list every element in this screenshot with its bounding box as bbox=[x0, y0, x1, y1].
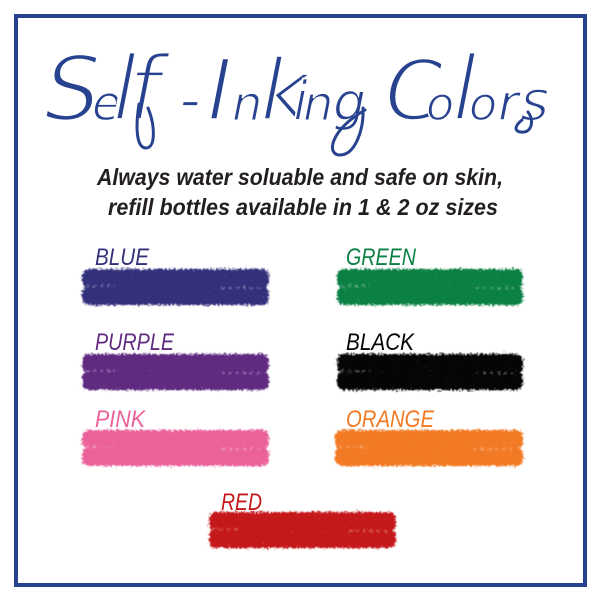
title: r bbox=[498, 74, 522, 132]
title: f bbox=[128, 37, 172, 142]
title: S bbox=[44, 37, 101, 142]
subtitle: Always water soluable and safe on skin, bbox=[96, 164, 503, 190]
subtitle: refill bottles available in 1 & 2 oz sizes bbox=[108, 194, 498, 220]
swatch: green: GREEN bbox=[346, 244, 417, 271]
title: k bbox=[260, 41, 313, 141]
subtitle bbox=[96, 164, 503, 220]
title: o bbox=[469, 77, 497, 131]
swatch: blue bbox=[82, 244, 269, 305]
swatch: orange bbox=[335, 406, 523, 466]
swatch: purple bbox=[82, 329, 269, 390]
title: I bbox=[207, 41, 232, 141]
title: - bbox=[160, 65, 201, 135]
swatch: pink: PINK bbox=[95, 406, 146, 433]
title bbox=[44, 37, 549, 155]
title: n bbox=[303, 76, 333, 132]
title: s bbox=[520, 69, 549, 134]
swatch: purple: PURPLE bbox=[95, 329, 175, 356]
title: e bbox=[92, 76, 122, 132]
title: l bbox=[112, 37, 137, 142]
title: n bbox=[232, 76, 262, 132]
title: i bbox=[293, 70, 308, 133]
title flourishes bbox=[137, 104, 531, 155]
swatch: blue: BLUE bbox=[95, 244, 150, 271]
title: o bbox=[426, 77, 454, 131]
swatch: pink bbox=[82, 406, 269, 466]
swatch: black: BLACK bbox=[346, 329, 415, 356]
swatch: black bbox=[337, 329, 523, 390]
swatch: green bbox=[337, 244, 523, 305]
title: g bbox=[333, 73, 366, 133]
swatch: red bbox=[209, 489, 396, 548]
swatch: red: RED bbox=[221, 489, 262, 516]
title: C bbox=[358, 42, 444, 140]
title: l bbox=[452, 37, 477, 142]
swatch: orange: ORANGE bbox=[346, 406, 435, 433]
